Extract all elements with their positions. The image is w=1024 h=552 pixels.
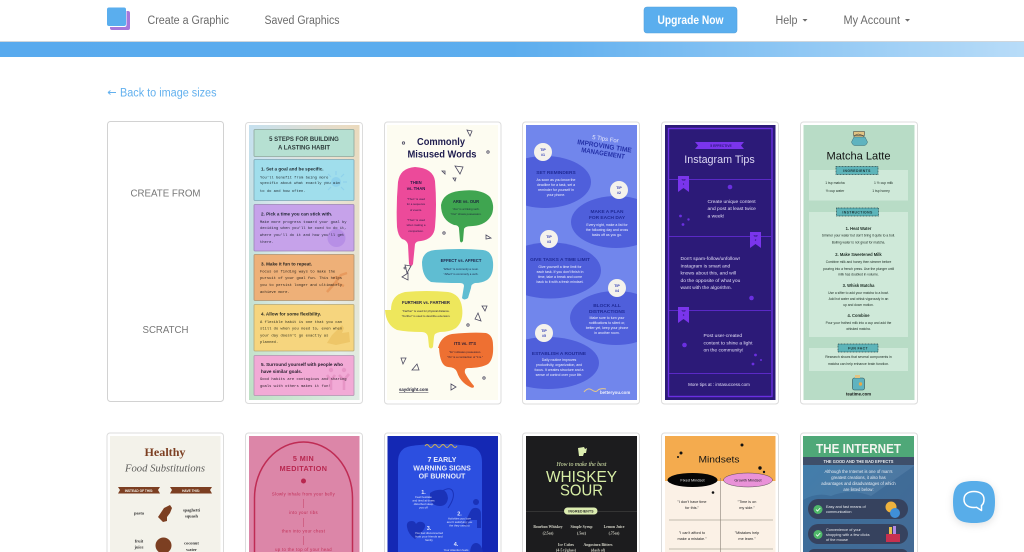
signs list: 3.	[427, 526, 432, 532]
subheading	[803, 457, 914, 465]
speech bubble: its vs it's: "It's" is a contraction of "it is."	[447, 355, 483, 359]
nav menu: help: Help	[776, 15, 798, 27]
tip text: deadline for a task, set a	[537, 183, 575, 187]
signs list: from your friends and	[415, 534, 443, 538]
panel: meditation template	[246, 433, 362, 552]
benefit row 2: shopping with a few clicks	[826, 533, 870, 537]
tip ribbons	[678, 176, 761, 323]
panel: time management template: TIP	[616, 186, 622, 190]
intro: advantages and disadvantages of which	[821, 481, 896, 486]
ingredient list: Lemon Juice	[604, 525, 625, 529]
benefit row 1: Easy and fast means of	[826, 505, 867, 509]
step 3: Focus on finding ways to make the	[260, 270, 336, 274]
tip copy: on the community!	[704, 348, 743, 354]
step 4: your day doesn't go exactly as	[260, 334, 328, 338]
speech bubble: further vs farther	[385, 291, 462, 348]
step 3: 3. Make it fun to repeat.	[261, 262, 312, 266]
instructions panel: INSTRUCTIONS	[842, 210, 873, 214]
signs list: You feel disconnected	[415, 531, 443, 535]
panel: instagram tips template: TIP	[681, 178, 686, 182]
icon: kettle	[852, 132, 868, 146]
instructions panel: Simmer your water but don't bring it quite to a boil.	[822, 234, 895, 238]
heading: Commonly	[417, 136, 465, 148]
mindset quotes: me learn."	[738, 537, 756, 541]
tip text: sense of control over your life.	[536, 373, 582, 377]
speech bubble: then vs than: "Than" is used	[407, 218, 425, 222]
substitution rows: water	[186, 547, 197, 552]
panel: time management template: TIP	[540, 148, 546, 152]
panel: time management template	[522, 122, 640, 404]
ingredients panel	[809, 166, 908, 200]
tip copy: and post at least twice	[708, 206, 756, 212]
panel: time management template: #1	[541, 153, 545, 157]
heading: How to make the best	[556, 462, 607, 468]
panel: time management template: TIP	[541, 329, 547, 333]
speech bubble: further vs farther: "Farther" is used for physical distance.	[402, 309, 450, 313]
substitution rows: juice	[133, 544, 144, 550]
step 1: You'll benefit from being more	[260, 176, 329, 180]
nav menu: my account: My Account	[844, 15, 901, 27]
step 4: 4. Allow for some flexibility.	[261, 312, 321, 316]
speech bubble: effect vs affect	[422, 249, 493, 300]
instructions panel: Combine milk and honey then simmer before	[826, 260, 891, 264]
source: teatime.com	[846, 392, 871, 396]
fun fact panel: matcha can help enhance brain function.	[828, 362, 889, 366]
column ribbons	[118, 487, 212, 494]
step 2: 2. Pick a time you can stick with.	[261, 212, 332, 216]
speech bubble: then vs than: "Then" is used	[407, 197, 425, 201]
breathing steps: Slowly inhale from your belly	[272, 492, 336, 496]
step 2: deciding when you'll be cued to do it,	[260, 226, 347, 231]
tip text: Make sure to turn your	[589, 316, 625, 320]
icon: glass	[578, 447, 587, 456]
signs list: disturbed sleep	[414, 502, 434, 506]
arch	[254, 442, 352, 552]
speech bubble: are vs our: "Our" shows possession.	[451, 212, 482, 216]
signs list: the they used to	[449, 524, 470, 528]
column ribbons: HAVE THIS:	[182, 489, 200, 493]
signs list: family	[425, 538, 433, 542]
heading	[254, 130, 354, 156]
benefit row 1: communication	[826, 510, 852, 514]
footer: betteryou.com	[600, 390, 630, 395]
tip copy: want with the algorithm.	[680, 285, 732, 291]
mindset quotes: "Time is on	[738, 500, 756, 504]
tip text: in another room.	[594, 331, 620, 335]
signs list: 2.	[457, 512, 462, 518]
heading: MANAGEMENT	[581, 147, 626, 161]
tip text: DISTRACTIONS	[589, 309, 626, 315]
green header	[803, 436, 914, 457]
step 5: Good habits are contagious and sharing	[260, 377, 347, 382]
heading	[546, 462, 617, 500]
tip text: focus. It creates structure and a	[534, 368, 584, 372]
column ribbons: INSTEAD OF THIS:	[125, 489, 153, 493]
instructions panel: Add hot water and whisk vigorously in an	[829, 297, 889, 301]
tip text: GIVE TASKS A TIME LIMIT	[530, 257, 590, 263]
panel: instagram tips template	[662, 122, 778, 404]
panel: instagram tips template: TIP	[681, 309, 686, 313]
back link: Back to image sizes	[120, 88, 217, 100]
panel: create from scratch	[108, 122, 224, 402]
tip copy: Instagram is smart and	[680, 264, 731, 270]
tip text: your phone.	[547, 193, 565, 197]
ingredient list: Simple Syrup	[570, 525, 593, 529]
speech bubble: further vs farther: "Further" is used to describe extension.	[402, 314, 451, 318]
top navigation bar	[0, 0, 1024, 42]
heading: 5 Tips For	[592, 135, 619, 145]
speech bubble: its vs it's: "Its" indicates possession.	[449, 350, 481, 354]
speech bubble: then vs than: for a sequence	[407, 202, 426, 206]
tip text: ESTABLISH A ROUTINE	[532, 351, 587, 357]
mindset quotes: my side."	[739, 506, 755, 510]
instructions panel: 2. Make Sweetened Milk	[835, 252, 882, 257]
signs list: Activities you love	[448, 516, 471, 520]
tip text: time, take a break and come	[538, 275, 582, 279]
step 5: 5. Surround yourself with people who	[261, 362, 343, 367]
mindset quotes: for this."	[685, 506, 700, 510]
benefit row 2	[808, 524, 908, 544]
icon: coconut	[156, 538, 172, 552]
heading: MEDITATION	[280, 464, 327, 473]
instructions panel: milk has doubled in volume.	[838, 272, 879, 276]
step 3: pursuit of your goal fun. This helps	[260, 276, 342, 281]
fun fact panel	[809, 344, 908, 371]
nav link: saved graphics: Saved Graphics	[264, 15, 340, 27]
speech bubble: then vs than: comparison.	[408, 229, 424, 233]
speech bubble: then vs than: vs. THAN	[407, 186, 425, 191]
step 2	[254, 204, 354, 251]
decorative triangles	[401, 130, 491, 390]
tip text: SET REMINDERS	[536, 170, 577, 176]
signs list: aren't satisfying you	[447, 520, 473, 524]
intro: greatest creations, it also has	[831, 475, 886, 480]
intro	[821, 469, 896, 492]
pill: growth mindset: Growth Mindset	[734, 478, 763, 482]
mindset quotes: "I can't afford to	[679, 531, 705, 535]
ingredient list: Bourbon Whiskey	[533, 525, 563, 529]
step 1: specific about what exactly you aim	[260, 181, 340, 186]
instructions panel	[809, 208, 908, 337]
speech bubble: then vs than: THEN	[410, 180, 422, 185]
heading: Healthy	[144, 447, 186, 459]
substitution rows: pasta	[134, 510, 145, 516]
signs list: 1.	[421, 490, 426, 496]
column divider	[669, 478, 773, 552]
icon: flower	[301, 478, 306, 484]
tip copy: Post user-created	[704, 333, 742, 339]
step 1: to do and how often.	[260, 189, 306, 194]
panel: matcha latte template	[800, 122, 918, 404]
panel: instagram tips template: 2	[755, 238, 757, 242]
step 1	[254, 160, 354, 200]
dividers	[669, 180, 771, 374]
panel: create from scratch: SCRATCH	[142, 325, 188, 336]
step 4	[254, 304, 354, 351]
button: upgrade now	[644, 7, 737, 33]
footer	[584, 389, 630, 395]
tip text: back to it with a fresh mindset.	[536, 280, 584, 284]
tip copy: a week!	[708, 214, 724, 220]
ingredient list: (.5oz)	[577, 532, 587, 536]
substitution rows: spaghetti	[183, 508, 201, 512]
mindset quotes: make a mistake."	[678, 537, 707, 541]
tip text: MAKE A PLAN	[591, 209, 624, 215]
instructions panel: Pour your frothed milk into a cup and add the	[826, 321, 892, 325]
benefit row 2: of the mouse	[826, 538, 848, 542]
pill: fixed mindset: Fixed Mindset	[680, 478, 706, 482]
panel: time management template: TIP	[614, 284, 620, 288]
heading: SOUR	[560, 482, 603, 500]
step 2: Make more progress toward your goal by	[260, 220, 347, 225]
icon: app logo	[106, 7, 130, 30]
tip text: Daily routine improves	[542, 358, 577, 362]
tip text: Every night, make a list for	[586, 223, 628, 227]
heading: A LASTING HABIT	[278, 146, 330, 152]
panel: instagram tips template: 1	[683, 182, 685, 186]
speech bubble: its vs it's	[438, 333, 493, 388]
ingredients panel: 1 tsp honey	[872, 189, 890, 193]
heading	[577, 135, 633, 161]
intro: Although the Internet is one of man's	[824, 469, 893, 474]
panel: lasting habit template	[246, 122, 362, 404]
ingredient list: (.75oz)	[609, 532, 620, 536]
ingredient list	[533, 525, 625, 552]
substitution rows: squash	[185, 514, 199, 518]
heading: 7 EARLY	[428, 457, 457, 464]
speech bubble: then vs than: of events.	[410, 208, 422, 212]
mindset quotes: "Mistakes help	[735, 531, 759, 535]
heading	[684, 142, 755, 166]
orange header	[665, 436, 776, 481]
ingredients panel: INGREDIENTS	[843, 169, 871, 173]
speech bubble: effect vs affect: EFFECT vs. AFFECT	[441, 258, 482, 263]
heading: WARNING SIGNS	[413, 466, 471, 472]
panel: create from scratch: CREATE FROM	[130, 188, 200, 200]
intro: are listed below:	[843, 487, 874, 492]
panel: time management template: #4	[615, 289, 619, 293]
sparkles	[677, 444, 765, 494]
heading: Instagram Tips	[684, 154, 755, 166]
tip copy	[680, 199, 756, 354]
heading	[280, 454, 327, 473]
breathing steps: up to the top of your head	[275, 547, 332, 552]
substitution rows	[133, 508, 201, 552]
heading	[413, 457, 471, 480]
speech bubble: its vs it's: ITS vs. IT'S	[454, 341, 476, 346]
tip copy: do the opposite of what you	[680, 278, 741, 284]
instructions panel: whisked matcha.	[846, 327, 871, 331]
tip text: reminder for yourself in	[538, 188, 574, 192]
sparkles	[679, 185, 762, 365]
tip badges	[534, 143, 628, 342]
substitution rows: fruit	[135, 538, 144, 544]
breathing steps: then into your chest	[282, 528, 326, 534]
fun fact panel: FUN FACT	[848, 346, 869, 350]
icon: squash	[158, 505, 172, 522]
panel: instagram tips template: TIP	[753, 234, 758, 238]
ingredient list: (2.5oz)	[543, 532, 554, 536]
tip copy: content to shine a light	[704, 340, 753, 346]
tip text: productivity, organization, and	[536, 363, 582, 367]
panel: healthy food substitutions template	[107, 433, 224, 552]
ingredient list: Ice Cubes	[558, 543, 574, 547]
ingredients label: INGREDIENTS	[568, 510, 594, 514]
step 3: achieve more.	[260, 290, 290, 295]
speech bubble: then vs than: when making a	[407, 223, 426, 227]
step 3: you to persist longer and ultimately	[260, 283, 343, 288]
signs list	[412, 490, 473, 552]
source: saydright.com	[399, 387, 429, 392]
heading: THE INTERNET	[816, 442, 901, 456]
heading: Misused Words	[408, 148, 477, 160]
tip text: the following day and cross	[586, 228, 628, 232]
panel: commonly misused words template	[384, 122, 501, 404]
instructions panel: Boiling water is not great for matcha.	[832, 240, 885, 244]
signs list: and tired at times	[412, 498, 435, 502]
heading: OF BURNOUT	[419, 474, 466, 480]
step 4: planned.	[260, 340, 278, 345]
icon silhouettes	[407, 489, 483, 552]
step 2: where you'll do it and how you'll get	[260, 233, 344, 238]
benefit row 1	[808, 499, 908, 519]
panel: time management template: #3	[547, 240, 551, 244]
nav link: create a graphic: Create a Graphic	[148, 15, 229, 27]
step 5: have similar goals.	[261, 369, 302, 374]
speech bubble: then vs than	[397, 167, 436, 266]
tip copy: Create unique content	[708, 199, 756, 205]
instructions panel: Use a sifter to add your matcha to a bowl.	[828, 291, 889, 295]
heading: Mindsets	[698, 454, 740, 466]
tip text: FOR EACH DAY	[589, 215, 626, 221]
panel: mindsets template	[662, 433, 778, 552]
instructions panel: 1. Heat Water	[846, 226, 872, 231]
panel: time management template: #2	[617, 191, 621, 195]
panel: healthy food substitutions template: Food Substitutions	[124, 464, 205, 474]
step 1: 1. Set a goal and be specific.	[261, 166, 324, 172]
instructions panel: 3. Whisk Matcha	[843, 283, 875, 288]
instructions panel: 4. Combine	[847, 313, 870, 318]
mindset quotes: "I don't have time	[677, 500, 707, 504]
tip text: each task. If you don't finish in	[537, 270, 583, 274]
benefit row 3	[808, 549, 908, 552]
tip text: notifications to silent or,	[589, 321, 625, 325]
tip text: Give yourself a time limit for	[538, 265, 582, 269]
tip text: As soon as you know the	[537, 178, 576, 182]
panel: whiskey sour template	[522, 433, 640, 552]
footer: More tips at : imtasuccess.com	[688, 382, 750, 387]
panel: the internet template	[800, 433, 918, 552]
tip copy: Don't spam-follow/unfollow!	[680, 256, 740, 262]
step 3	[254, 254, 354, 300]
heading	[408, 136, 477, 160]
panel: the internet template: THE GOOD AND THE BAD EFFECTS	[824, 459, 894, 464]
breathing steps	[272, 492, 336, 552]
icon: mug	[852, 375, 864, 390]
tip text: tasks off as you go.	[592, 233, 622, 237]
instructions panel: pouring into a french press. Use the plunger until	[823, 267, 894, 271]
signs list: Feel hesitate	[415, 495, 432, 499]
instructions panel: up and down motion.	[843, 303, 874, 307]
heading: 5 STEPS FOR BUILDING	[269, 137, 339, 143]
ingredients panel: 1 tsp matcha	[825, 181, 845, 185]
speech bubble: effect vs affect: "Affect" is commonly a verb.	[444, 272, 479, 276]
signs list: you off	[419, 506, 428, 510]
ingredient list: Angostura Bitters	[583, 543, 613, 547]
panel: instagram tips template: 3	[683, 313, 685, 317]
ingredients panel: 1 ½ cup milk	[874, 181, 893, 185]
step 4: still do when you need to, even when	[260, 326, 342, 332]
breathing steps: into your ribs	[289, 510, 318, 515]
gradient banner	[0, 42, 1024, 57]
tip text: BLOCK ALL	[593, 303, 621, 309]
panel: burnout template	[384, 433, 501, 552]
heading: 5 MIN	[293, 454, 314, 463]
mindset quotes	[677, 500, 759, 541]
heading: IMPROVING TIME	[577, 139, 633, 155]
tip text	[530, 170, 628, 377]
speech bubble: are vs our	[441, 190, 493, 242]
ingredients panel: ½ cup water	[826, 189, 845, 193]
signs list: Your Attention feels	[444, 548, 469, 552]
decoration	[425, 444, 457, 448]
heading: Matcha Latte	[826, 150, 890, 162]
panel: time management template: TIP	[546, 235, 552, 239]
step 5: goals with others makes it fun!	[260, 384, 331, 389]
blobs	[526, 156, 637, 389]
fun fact panel: Research shows that several components in	[825, 355, 892, 359]
substitution rows: coconut	[184, 540, 199, 546]
benefit row 2: Convenience of your	[826, 528, 862, 532]
tip text: better yet, keep your phone	[586, 326, 628, 330]
button: upgrade now: Upgrade Now	[658, 15, 724, 27]
heading: 5 EFFECTIVE	[710, 144, 732, 148]
speech bubble: effect vs affect: "Effect" is commonly a noun.	[443, 267, 479, 271]
heading: WHISKEY	[546, 469, 617, 486]
step 5	[254, 356, 354, 396]
signs list: 4.	[454, 542, 459, 548]
speech bubble: are vs our: "Are" is a linking verb.	[452, 207, 480, 211]
step 2: there.	[260, 240, 274, 245]
speech bubble: further vs farther: FURTHER vs. FARTHER	[402, 300, 450, 305]
panel: time management template: #5	[542, 334, 546, 338]
tip copy: knows about this, and will	[680, 270, 736, 276]
icon: chat help button	[953, 481, 995, 523]
step 4: A flexible habit is one that you can	[260, 320, 342, 325]
speech bubble: are vs our: ARE vs. OUR	[453, 199, 479, 204]
